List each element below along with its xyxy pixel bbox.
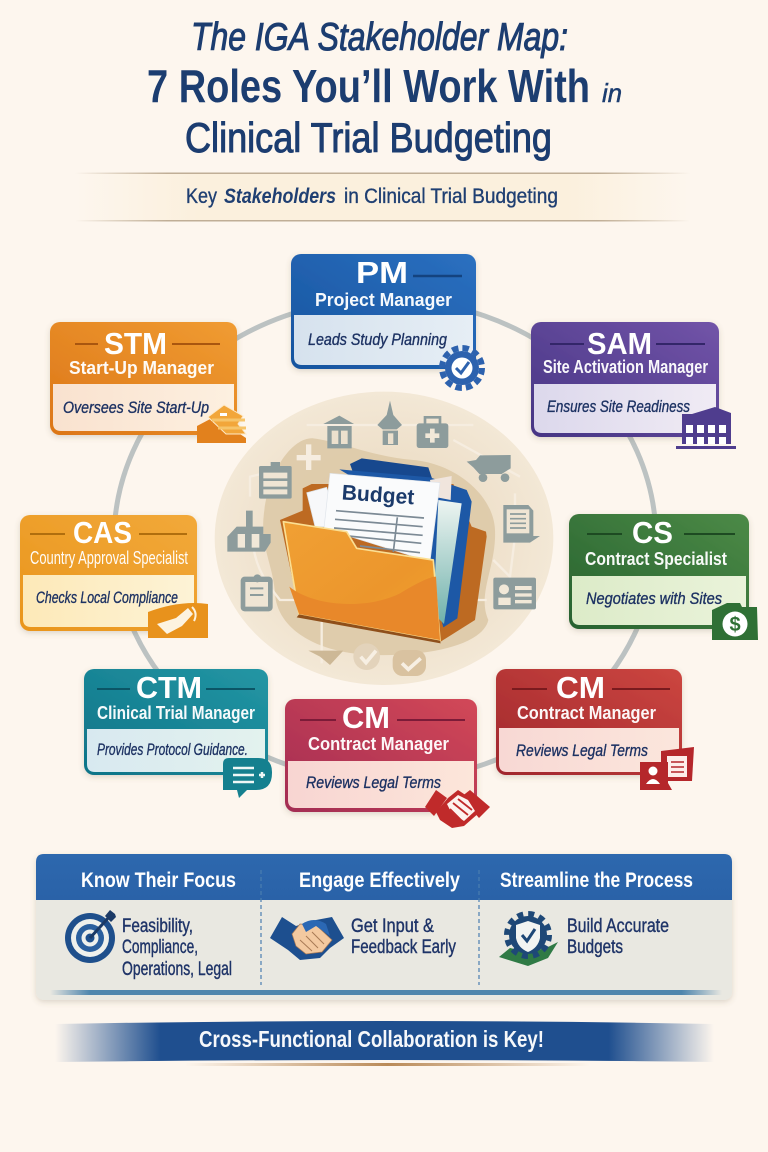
subtitle band: Stakeholders xyxy=(224,185,336,208)
icon: building xyxy=(676,407,736,449)
icon: shield gear xyxy=(499,914,558,966)
icon: person document xyxy=(640,747,694,790)
title: 7 Roles You’ll Work With xyxy=(147,60,590,112)
column: know their focus: Compliance, xyxy=(122,937,198,958)
card: PM: Leads Study Planning xyxy=(308,330,447,349)
card: CS: Negotiates with Sites xyxy=(586,589,722,608)
icon: cross xyxy=(297,444,321,470)
card: SAM xyxy=(531,322,736,449)
folder xyxy=(280,458,487,643)
icon: clipboard list xyxy=(259,462,292,499)
icon: dollar folder: $ xyxy=(729,614,741,636)
card: STM: STM xyxy=(104,326,167,361)
icon: clinic tower xyxy=(377,401,402,445)
icon: gavel tag xyxy=(148,603,208,638)
card: CTM: Clinical Trial Manager xyxy=(97,702,255,723)
card: CS: Contract Specialist xyxy=(585,548,727,569)
folder: Budget xyxy=(341,480,415,509)
blue files xyxy=(350,458,432,479)
card: CTM: CTM xyxy=(136,670,202,705)
budget sheet xyxy=(324,473,440,562)
icon: id card xyxy=(493,578,536,609)
column: engage effectively xyxy=(270,868,460,960)
icon: handshake xyxy=(270,917,344,960)
icon: gear check xyxy=(442,348,482,388)
icon: dollar folder xyxy=(712,603,758,640)
card: CAS: CAS xyxy=(73,515,132,550)
column: engage effectively: Feedback Early xyxy=(351,937,456,958)
icon: target xyxy=(65,910,116,963)
column: streamline the process: Streamline the Process xyxy=(500,868,693,892)
card: CS xyxy=(569,514,758,640)
card: CM centre: Reviews Legal Terms xyxy=(306,773,441,792)
card: CAS xyxy=(20,515,208,638)
title: The IGA Stakeholder Map: xyxy=(191,16,568,59)
icon: speech bubble xyxy=(223,758,272,798)
subtitle band xyxy=(75,172,690,222)
column: know their focus: Operations, Legal xyxy=(122,959,232,980)
connector ring xyxy=(114,299,656,781)
column: streamline the process: Build Accurate xyxy=(567,916,669,937)
panel: takeaways xyxy=(36,854,732,1000)
icon: medical case xyxy=(417,417,448,448)
card: STM xyxy=(50,322,246,443)
central budget graphic xyxy=(215,392,553,685)
column: streamline the process: Budgets xyxy=(567,937,623,958)
faded check badges xyxy=(308,643,426,676)
icon: handshake xyxy=(425,790,490,828)
banner xyxy=(55,1021,714,1066)
title: in xyxy=(602,78,622,108)
card: CTM xyxy=(84,669,272,798)
card: CAS: Checks Local Compliance xyxy=(36,588,178,607)
grey icons xyxy=(227,401,540,611)
title: Clinical Trial Budgeting xyxy=(185,114,552,161)
card: PM: Project Manager xyxy=(315,289,452,310)
card: CM right: Contract Manager xyxy=(517,702,656,723)
card: CAS: Country Approval Specialist xyxy=(30,547,188,568)
column: streamline the process xyxy=(499,868,693,966)
folder back xyxy=(280,484,487,642)
title xyxy=(147,16,622,161)
column: engage effectively: Get Input & xyxy=(351,916,434,937)
card: SAM: Ensures Site Readiness xyxy=(547,397,690,416)
icon: site building xyxy=(197,405,246,443)
card: SAM: SAM xyxy=(587,326,652,361)
icon: checklist clipboard xyxy=(241,574,273,611)
subtitle band: in Clinical Trial Budgeting xyxy=(344,185,558,208)
card: CM centre xyxy=(285,699,490,828)
column: know their focus: Feasibility, xyxy=(122,916,193,937)
icon: bank xyxy=(323,416,354,448)
card: CTM: Provides Protocol Guidance. xyxy=(97,740,248,759)
card: SAM: Site Activation Manager xyxy=(543,356,708,377)
card: CM centre: Contract Manager xyxy=(308,733,449,754)
banner: Cross-Functional Collaboration is Key! xyxy=(199,1026,544,1052)
panel header xyxy=(36,854,732,900)
faint network lines xyxy=(250,425,520,663)
folder front xyxy=(283,522,440,641)
card: CS: CS xyxy=(632,515,673,550)
background disc xyxy=(215,392,553,685)
card: STM: Start-Up Manager xyxy=(69,357,214,378)
card: CM centre: CM xyxy=(342,700,390,735)
column: know their focus: Know Their Focus xyxy=(81,868,236,892)
card: PM xyxy=(291,254,482,388)
icon: document xyxy=(503,505,540,543)
card: STM: Oversees Site Start-Up xyxy=(63,398,209,417)
icon: factory xyxy=(227,511,271,552)
card: CM right xyxy=(496,669,694,790)
card: CM right: CM xyxy=(556,670,605,705)
card: CM right: Reviews Legal Terms xyxy=(516,741,648,760)
subtitle band: Key xyxy=(186,185,217,208)
column: engage effectively: Engage Effectively xyxy=(299,868,460,892)
icon: delivery truck xyxy=(467,455,511,482)
column: know their focus xyxy=(65,868,236,980)
paper stack xyxy=(307,487,340,527)
card: PM: PM xyxy=(356,255,408,290)
